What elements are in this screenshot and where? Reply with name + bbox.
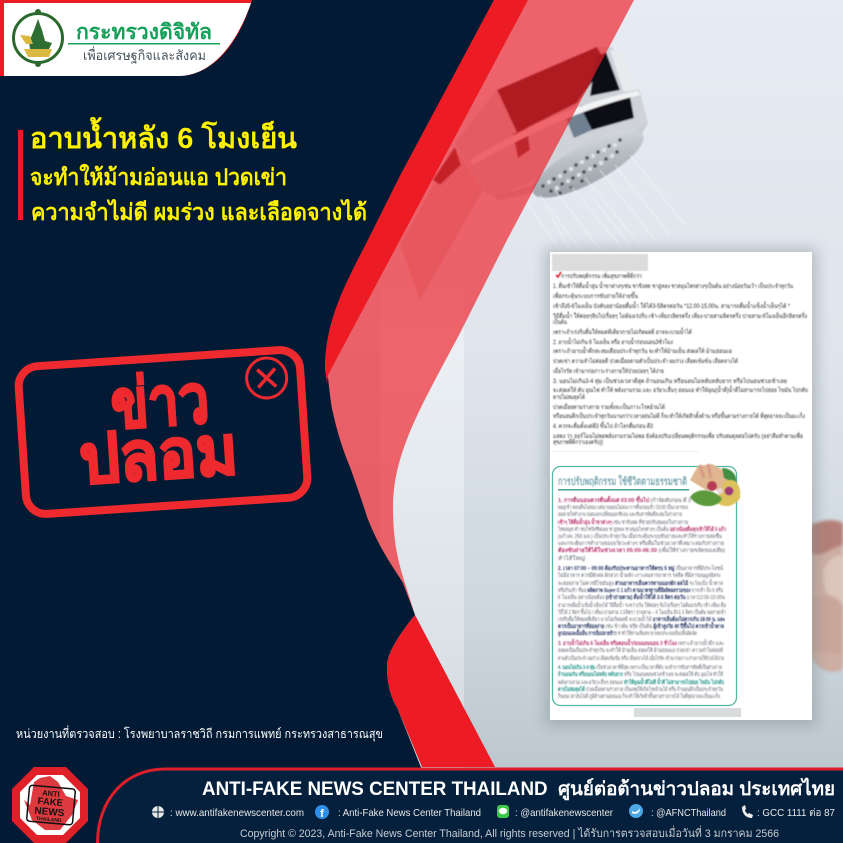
website: : www.antifakenewscenter.com xyxy=(170,807,304,819)
headline line 2: จะทำให้ม้ามอ่อนแอ ปวดเข่า xyxy=(30,163,287,190)
post text: เพราะถ้าเร่งรีบดื่มให้หมดทีเดียวกายไม่เกิดผลดี อาจจะบวมน้ำได้ xyxy=(553,326,692,336)
icon: ministry emblem xyxy=(14,9,62,67)
post text: วิธีดื่มน้ำ ให้ค่อยๆจิบไปเรื่อยๆ ไม่ต้องเร่งรีบ เช้า-เที่ยงวลิตรครึ่ง เที่ยง-บ่ายสามลิตรครึ่ง บ่ายสาม-6โมงเย็นอีกลิตรครึ่ง xyxy=(552,310,807,320)
advice text: 3. อาบน้ำไม่เกิน 6 โมงเย็น หรือตอนน้ำก่อนนอนนอน 3 ชั่วโมง เพราะถ้าอาบน้ำดึก และ xyxy=(558,638,724,647)
logo: Anti-Fake News stop sign: ANTI xyxy=(42,788,60,799)
post text: ปวดเข่า ความจำไม่ค่อยดี ปวดเมื่อยตามตัวเป็นประจำ ผมร่วง เลือดเข้มข้น เลือดจางได้ xyxy=(553,356,738,365)
advice text: และกระตุ้นการทำงานของอวัยวะต่างๆ หรือดื่มในช่วงเวลาที่เหมาะสมกับร่างกาย xyxy=(558,539,724,547)
advice text: ก็นอนเวลาอันไม่ดี ภูมิต้านทานอ่อนแอ ก็จะทำให้เกิดสิวขึ้นตามร่างกายได้ ในที่สุดอาจจะเป็นมะเร็ง xyxy=(558,692,720,700)
icon: line xyxy=(497,805,509,818)
ministry subtitle: เพื่อเศรษฐกิจและสังคม xyxy=(83,46,206,64)
advice text: พลังงานรวม และอวัยวะอื่นๆ อ่อนแอ ทำให้อุณน้ำดีไม่ดี น้ำดี ไม่สามารถไปย่อย ไขมัน ไปกดับ xyxy=(558,677,724,686)
panel: lifestyle advice box xyxy=(552,464,740,706)
icon: facebook xyxy=(315,805,329,820)
logo: Anti-Fake News stop sign xyxy=(12,767,88,843)
ministry name: กระทรวงดิจิทัล xyxy=(76,21,212,44)
advice text xyxy=(557,495,726,700)
advice text: 2. เวลา 07:00 – 09:00 ต้องรับประทานอาหารให้ครบ 5 หมู่ เป็นอาหารที่มีประโยชน์ xyxy=(558,564,723,573)
advice text: 1. การตื่นนอนควรตื่นตั้งแต่ 03:00 ขึ้นไป (กำจัดตับก่อน ตี 3 xyxy=(558,495,691,504)
advice text: ไทยสมุท ทำ ทบไซรัสซีฟเลย ชาอู่หลง ชาสมุนไพรต่างๆ เป็นต้น อย่างน้อยดื่มทุกเช้าให้ได้ 5 แก้ว xyxy=(557,525,726,533)
advice text: 4. นอนไม่เกิน 3-4 ทุ่ม เป็นช่วงเวลาที่ดีสุด เพราะเป็นเวลาที่ตับ จะทำการขับสารพิษที่เป็นต่างกาย xyxy=(558,663,722,671)
post text: ตาปไม่สมดุลได้ xyxy=(553,393,585,401)
logo: Anti-Fake News stop sign: FAKE xyxy=(37,796,63,809)
headline block xyxy=(18,116,367,225)
headline line 3: ความจำไม่ดี ผมร่วง และเลือดจางได้ xyxy=(31,198,367,225)
post text: เพื่อกระตุ้นระบบการขับถ่ายให้ง่ายขึ้น xyxy=(553,290,638,300)
copyright: Copyright © 2023, Anti-Fake News Center Thailand, All rights reserved | ได้รับการตรวจสอบเมื่อวันที่ 3 มกราคม 2566 xyxy=(240,825,779,840)
post text: 1. ตื่นเช้าให้ดื่มน้ำอุ่น น้ำขาต่างๆเช่น ชาขิงสด ชาอู่หลง ชาสมุนไพรต่างๆเป็นต้น อย่างน้อยวันเว้า เป็นประจำทุกวัน xyxy=(553,280,793,290)
photo: shower head xyxy=(400,47,652,300)
icon: facebook: f xyxy=(320,808,324,820)
red lower corner shape xyxy=(387,615,495,767)
line handle: : @antifakenewscenter xyxy=(515,807,613,819)
photo: hand under water xyxy=(810,520,843,672)
image: vegetables xyxy=(690,464,740,506)
source agency line: หน่วยงานที่ตรวจสอบ : โรงพยาบาลราชวิถี กรมการแพทย์ กระทรวงสาธารณสุข xyxy=(16,725,383,742)
post text: แสดง ว่า ฮอร์โมนไม่พอพลังงานรวมไม่พอ ยังต้องปรับเปลี่ยนพฤติกรรมเพื่อ ปรับสมดุลต่อไปครับ (อย่าลืมทำตามเพื่อ xyxy=(553,432,803,440)
post text: 4. ควรจะดื่มตั้งแต่ดี3 ขึ้นไป ถ้าโลกดื่มก่อน ดี3 xyxy=(553,420,654,430)
icon: x in circle xyxy=(245,357,288,399)
advice text: สามารถดื่มน้ำแข็งน้ำเย็นๆได้ วิธีดื่มน้ำ ระหว่างวัน ให้ค่อยๆ จิบไปเรื่อยๆ ไม่ต้องเร่งรีบ เช้า-เที่ยง ดื่ม xyxy=(558,601,726,609)
advice text: วิธีได้ 2 ลิตร ขึ้นไป / เที่ยง-บ่ายสาม 1.5ลิตร / บ่ายสาม – 6 โมงเย็น อีก1.5 ลิตร เป็นต้น พอถ่ายเข้า xyxy=(557,608,726,616)
post text xyxy=(552,272,808,446)
advice text: ไม่มีอาหาร ควรมีผักสด ผักสวก น้ำผลัก เกาะสมสารอาหาร รสจืด ที่มีสารอนุมูลอิสระ xyxy=(557,571,721,579)
advice text: ส่งผลเป็นเป็นประจำทุกวัน จะทำให้ ม้ามเย็น ส่งผลให้ ม้ามอ่อนแอ ปวดเข่า ความจำไม่ค่อยดี xyxy=(558,646,723,654)
advice text: ต้องขับถ่ายให้ได้ในช่วงเวลา 05:00-06:30 (เพื่อให้ร่างกายขจัดของเสีย) xyxy=(558,546,725,554)
post text: สุขภาพที่ดีกว่าเองครับ)) xyxy=(553,438,603,446)
icon: twitter xyxy=(629,804,643,818)
post text: 3. นอนไม่เกิน3-4 ทุ่ม เป็นช่วงเวลาดีสุด ถ้านอนเกิน หรือนอนไม่หลับหลับยาก หรือไปนอนช่วงเช้าเลย xyxy=(553,376,787,385)
icon: phone xyxy=(742,805,753,818)
advice text: เร่งรีบดื่มให้หมดที่เดียว อาจไม่เกิดผลดี จะบวมน้ำได้ อาหารเย็นต้องไม่ควรเกิน 18:00 น. และ xyxy=(558,615,725,623)
stamp word 2: ปลอม xyxy=(77,412,240,498)
post text: เช้าถึง5-6โมงเย็น บังคับอย่าน้อยดื่มน้ำ ให้ได้3-5ลิตรต่อวัน *12.00-15.00น. สามารถดื่มน้ำแข็งน้ำเย็นๆได้ * xyxy=(553,300,791,310)
post text: ปวดเมื่อยตามร่างกาย รวมทั้งจะเป็นภาวะโรคอ้วนได้ xyxy=(553,401,665,411)
footer band xyxy=(97,769,843,843)
facebook name: : Anti-Fake News Center Thailand xyxy=(338,807,481,819)
advice text: ตามตัวเป็นประจำ ผมร่วง เลือดเข้มข้น หรือ เลือดจางได้ เมื่อไรรัด เข้ามาก่อภาวะร่างกายให้ป่วยได้ง่าย xyxy=(558,654,724,662)
post text: เป็นต้น xyxy=(553,317,567,326)
pink translucent band xyxy=(300,0,634,615)
header: ministry logo tab xyxy=(0,0,252,76)
footer title: ANTI-FAKE NEWS CENTER THAILAND ศูนย์ต่อต้านข่าวปลอม ประเทศไทย xyxy=(202,777,835,801)
box heading: การปรับพฤติกรรม ใช้ชีวิตตามธรรมชาติ xyxy=(558,475,687,488)
post text: เพราะถ้าอาบน้ำดึกสะสมเดือนประจำทุกวัน จะทำให้ม้ามเย็น ส่งผลให้ ม้ามอ่อนแอ xyxy=(553,345,732,355)
photo: water streaks xyxy=(525,155,685,252)
advice text: ลูกอ่อนและมื้อเย็น การเย็นปลายข้าว ชาทำให้ท่านเห็นสบาย หลบประเจอเย็นปลิ้นผิดนัด xyxy=(558,628,697,638)
advice text: ตาปไม่สมดุลได้ ปวดเมื่อยตามร่างกาย เป็นเหตุให้เกิดโรคอ้วนได้ หรือ ถ้านอนดึกเป็นประจำทุกวัน xyxy=(558,685,723,693)
stamp word 1: ข่าว xyxy=(109,361,211,443)
icon: globe xyxy=(152,806,164,818)
red diagonal band xyxy=(325,0,528,383)
advice text: ควรเป็นอาหารที่ย่อยง่าย เช่น ข้าวต้ม ฟรุ๊ต เป็นต้น ผู้เข้าสูงวัย 40 ปีขึ้นไป ควรเข้าน้ำตาล xyxy=(558,621,724,631)
advice text: เช้าๆ ให้ดื่มน้ำอุ่น น้ำชาต่างๆ เช่น ชาขิงสด ที่ช่วยปรับสมดุลในร่างกาย xyxy=(558,517,688,526)
logo: Anti-Fake News stop sign: THAILAND xyxy=(36,816,62,824)
logo: Anti-Fake News stop sign: NEWS xyxy=(34,806,65,819)
post text: การปรับพฤติกรรม เพิ่มสุขภาพที่ดีกว่า xyxy=(561,272,642,280)
advice text: 6 โมงเย็น อย่างน้อยต้อง (เข้าถ่ายตาม) ดื่มน้ำให้ได้ 3-5 ลิตร ต่อวัน (เวลา12:00-15:00น xyxy=(558,592,725,601)
post text: เมื่อไรรัด เข้ามาก่อภาวะร่างกายให้ป่วยบ่อยๆ ได้ง่าย xyxy=(553,367,664,375)
advice text: พอดูเข้า ตอนตื่นไม่สอง แต่นานนอนไม่สอง การตื่นก่อนเข้า 03:00 เป็นเวลาของ xyxy=(558,503,688,511)
stamp: fake news xyxy=(17,349,309,515)
hotline: : GCC 1111 ต่อ 87 xyxy=(757,807,835,819)
advice text: ลมหายใจทำงาน ปอดแลกเปลี่ยนออกซิเจน และขับสารพิษที่สะสมในร่างกาย xyxy=(558,510,682,518)
advice text: ลำไส้ใหญ่ xyxy=(558,555,585,562)
headline line 1: อาบน้ำหลัง 6 โมงเย็น xyxy=(30,116,297,155)
panel: fake post screenshot xyxy=(545,248,817,726)
navy background panel xyxy=(0,0,494,770)
advice text: ถ้านอนเกิน หรือนอนไม่หลับ หลับยาก หรือ ไปนอนตอนช่วงเช้าเลย จะส่งผลให้ ตับ อุณไฟ ทำให้ xyxy=(558,670,723,678)
advice text: หรือกินเข้า ที่มอ ผลิตภาพ Super C 1 แก้ว ตามมาตรฐานที่มีผลิตผลรวมของ จากเข้า ถึง 5 หรือ xyxy=(558,586,723,594)
post text: 2. อาบน้ำไม่เกิน 6 โมงเย็น หรือ อาบน้ำก่อนนอน3ชั่วโมง xyxy=(553,336,673,346)
advice text: (แก้วละ 250 มล.) เป็นประจำทุกวัน เมื่อกระตุ้นระบบขับถ่ายและทำให้ร่างกายสดชื่น xyxy=(558,532,722,540)
advice text: จะย่อยง่าย ไม่ควรมีไขมันสูง ส่วนอาหารเย็นควรทานนอกผัก ผลไม้ ระวังแป้ง น้ำตาล xyxy=(558,579,723,587)
twitter handle: : @AFNCThailand xyxy=(651,807,726,819)
